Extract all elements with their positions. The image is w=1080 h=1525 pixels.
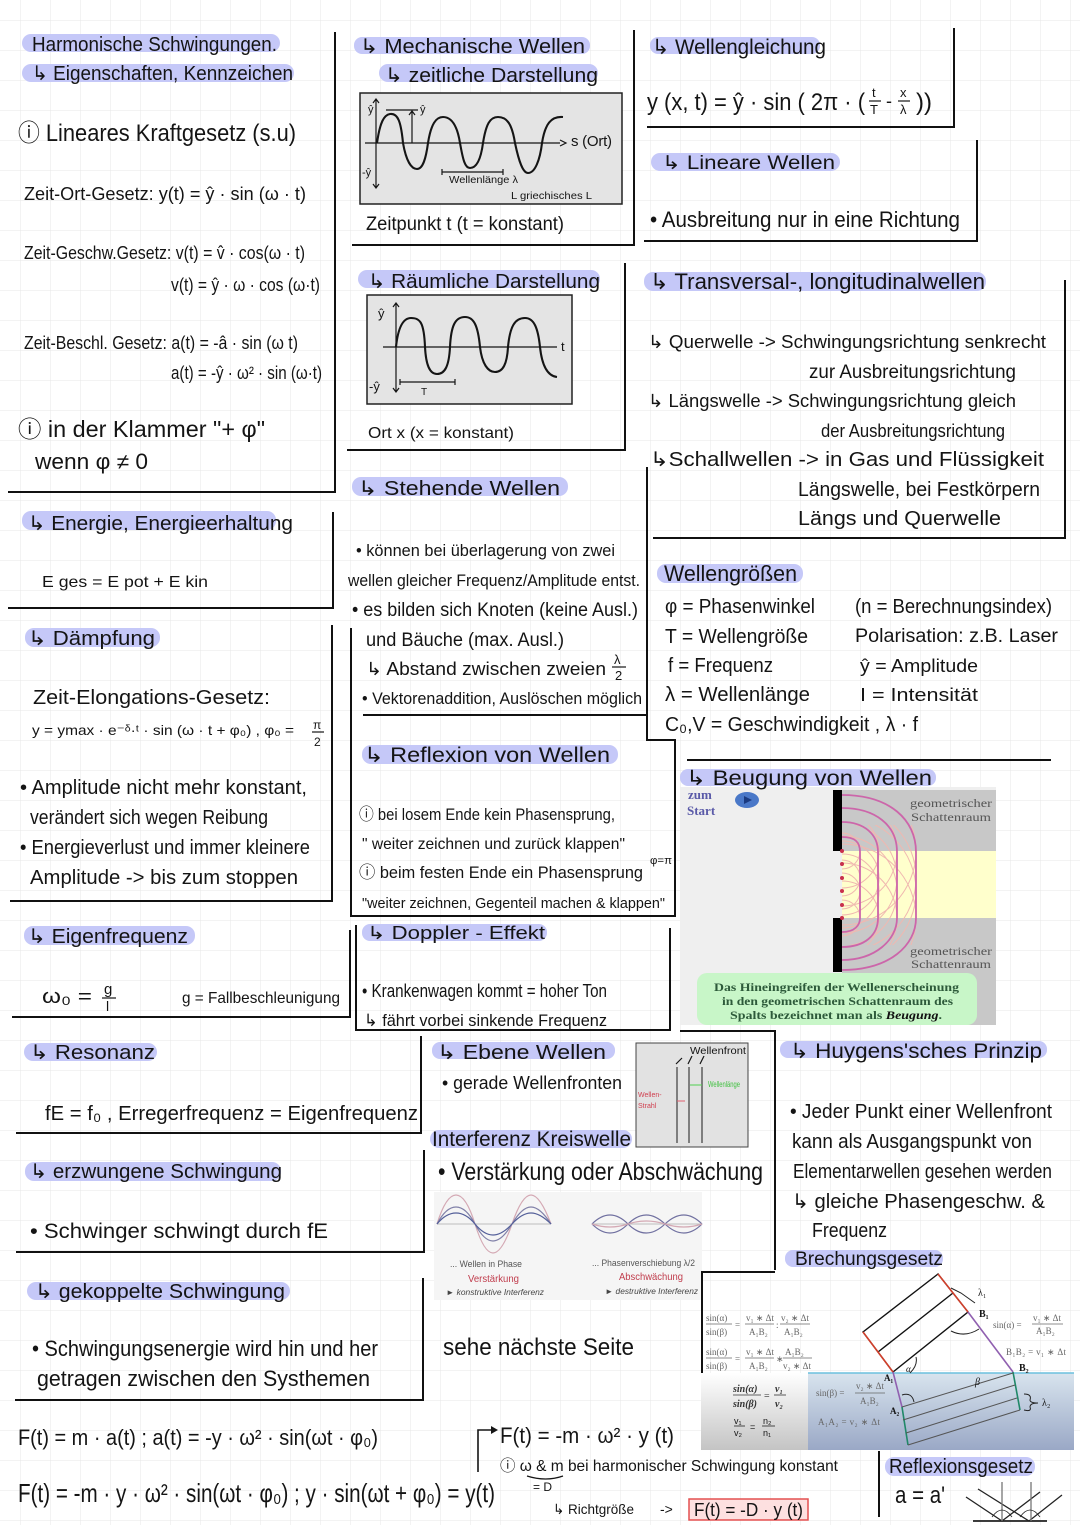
text: Querwelle: ↳ Querwelle -> Schwingungsrichtung senkrecht: [648, 332, 1046, 352]
panel: Energie: [8, 511, 333, 608]
heading: Interferenz Kreiswelle: Interferenz Kreiswelle: [432, 1128, 631, 1151]
formulas: refraction derivation: [706, 1313, 812, 1438]
formula: Zeit-Geschw.-Gesetz: Zeit-Geschw.Gesetz: v(t) = v̂ · cos(ω · t): [24, 243, 305, 263]
list: Amplitude: [20, 777, 310, 889]
list: further quantities: (n = Berechnungsindex): [855, 596, 1052, 618]
diagram: refraction: A₁B₂: [1036, 1326, 1055, 1336]
chart: wave over place: Wellenlänge λ: [449, 175, 518, 186]
note: omega and m constant: [500, 1457, 839, 1494]
text: Längswelle: ↳ Längswelle -> Schwingungsrichtung gleich: [648, 391, 1016, 411]
diagram: refraction: sin(α) =: [993, 1320, 1022, 1330]
text: Schallwellen: [650, 449, 1044, 530]
panel: Eigenfrequenz: [12, 926, 350, 1017]
formulas: refraction derivation: ∗: [776, 1354, 784, 1364]
formula: Zeit-Beschl.-Gesetz: Zeit-Beschl. Gesetz: a(t) = -â · sin (ω t): [24, 333, 298, 353]
panel: Resonanz: [16, 1036, 421, 1133]
text: Huygens: [790, 1101, 1052, 1242]
panel: räumliche Darstellung: [347, 263, 625, 450]
formulas: refraction derivation: :: [776, 1320, 779, 1330]
heading: Brechungsgesetz: Brechungsgesetz: [795, 1249, 943, 1270]
heading: Räumliche Darstellung: ↳ Räumliche Darstellung: [368, 271, 600, 293]
formula: Zeit-Geschw.-Gesetz: v(t) = ŷ · ω · cos (ω·t): [171, 275, 320, 295]
diagram: refraction: A₁A₂ = v₂ ∗ Δt: [818, 1417, 880, 1427]
formula: Wellengleichung: x: [900, 85, 907, 100]
chart: constructive and destructive interference: ... Wellen in Phase: [450, 1259, 522, 1269]
list: Reflexion: ⓘ beim festen Ende ein Phasensprung: [359, 863, 643, 882]
panel: Brechungsgesetz: [701, 1249, 1074, 1450]
diagram: refraction: α: [906, 1364, 911, 1374]
formula: Zeit-Elongations-Gesetz: π: [313, 718, 321, 732]
panel: lineares Kraftgesetz: [478, 1423, 839, 1520]
formulas: refraction derivation: sin(α): [732, 1384, 757, 1395]
heading: Reflexion von Wellen: ↳ Reflexion von Wellen: [364, 744, 610, 767]
text: Schallwellen: Längs und Querwelle: [798, 508, 1001, 530]
formulas: refraction derivation: v₂: [734, 1428, 742, 1438]
heading: Transversal-, Longitudinalwellen: ↳ Transversal-, longitudinalwellen: [650, 269, 985, 294]
list: quantities: f = Frequenz: [668, 655, 773, 677]
formulas: refraction derivation: =: [764, 1391, 770, 1402]
diagram: diffraction: geometrischer: [910, 944, 992, 958]
chart: wave over place: -ŷ: [362, 167, 372, 179]
chart: wave over time: ŷ: [378, 306, 385, 321]
text: Schwingungsenergie: • Schwingungsenergie wird hin und her: [32, 1336, 378, 1361]
list: Reflexion: ⓘ bei losem Ende kein Phasensprung,: [359, 805, 615, 824]
chart: wave over place: [360, 93, 622, 204]
text: Schwinger: • Schwinger schwingt durch fE: [30, 1220, 328, 1243]
arrow: to F(t): [478, 1426, 498, 1472]
text: gerade Wellenfronten: • gerade Wellenfronten: [442, 1073, 622, 1093]
heading: Mechanische Wellen: ↳ Mechanische Wellen: [360, 36, 585, 58]
panel: erzwungene Schwingung: [16, 1150, 424, 1252]
diagram: diffraction: Das Hineingreifen der Wellenerscheinung: [714, 980, 959, 994]
panel: Wellengleichung: [647, 28, 954, 127]
formulas: refraction derivation: sin(α): [706, 1313, 727, 1323]
formula: Zeit-Elongations-Gesetz: Zeit-Elongations-Gesetz:: [33, 687, 270, 709]
list: stehende Wellen: wellen gleicher Frequenz/Amplitude entst.: [347, 571, 640, 590]
diagram: Wellenfront: Strahl: [638, 1103, 657, 1110]
formulas: refraction derivation: sin(β): [706, 1327, 727, 1337]
list: further quantities: I = Intensität: [860, 685, 978, 705]
diagram: refraction: B₂: [1019, 1363, 1029, 1374]
formula: Wellengleichung: λ: [900, 102, 907, 117]
list: Amplitude: Amplitude -> bis zum stoppen: [30, 867, 298, 889]
panel: Transversal- und Longitudinalwellen: [644, 269, 1065, 538]
formula: Wellengleichung: y (x, t) = ŷ · sin ( 2π · (: [647, 89, 865, 116]
panel: Beugung von Wellen: [680, 767, 996, 1025]
heading: Eigenfrequenz: ↳ Eigenfrequenz: [28, 926, 188, 948]
chart: wave over place: ŷ: [420, 104, 426, 116]
formula: Wellengleichung: )): [916, 89, 932, 116]
formulas: refraction derivation: v₂: [775, 1399, 783, 1410]
list: Reflexion: φ=π: [650, 855, 672, 867]
formula: Zeit-Beschl.-Gesetz: [24, 333, 322, 383]
diagram: diffraction: Schattenraum: [911, 810, 992, 824]
formulas: refraction derivation: sin(β): [706, 1361, 727, 1371]
formulas: refraction derivation: n₁: [763, 1428, 771, 1438]
panel: Wellengrößen: [657, 561, 1059, 760]
text: Huygens: • Jeder Punkt einer Wellenfront: [790, 1101, 1052, 1123]
diagram: refraction: λ₁: [978, 1288, 986, 1299]
formula: Omega: ω₀ =: [42, 986, 92, 1008]
diagram: Wellenfront: Wellenlänge: [708, 1080, 740, 1089]
text: Schallwellen: ↳Schallwellen -> in Gas und Flüssigkeit: [650, 449, 1044, 471]
formulas: Kraft: F(t) = -m · y · ω² · sin(ωt · φ₀) ; y · sin(ωt + φ₀) = y(t): [18, 1478, 495, 1508]
chart: constructive and destructive interference: ... Phasenverschiebung λ/2: [592, 1258, 695, 1268]
chart: wave over time: [367, 295, 572, 404]
text: Querwelle: zur Ausbreitungsrichtung: [809, 362, 1016, 383]
text: Huygens: ↳ gleiche Phasengeschw. &: [792, 1191, 1046, 1213]
text: Schwingungsenergie: getragen zwischen den Systhemen: [37, 1366, 370, 1391]
diagram: diffraction: in den geometrischen Schattenraum des: [722, 994, 953, 1008]
formula: Energie: E ges = E pot + E kin: [42, 574, 208, 591]
list: quantities: λ = Wellenlänge: [665, 684, 810, 706]
list: stehende Wellen: ↳ Abstand zwischen zweien: [366, 659, 606, 679]
formula: Zeit-Elongations-Gesetz: [32, 687, 324, 749]
chart: constructive and destructive interference: ► konstruktive Interferenz: [446, 1288, 544, 1297]
formulas: Kraft: [18, 1425, 495, 1508]
text: Fallbeschleunigung: g = Fallbeschleunigung: [182, 990, 340, 1007]
list: Reflexion: [359, 805, 672, 912]
text: lineares Kraftgesetz: ⓘ Lineares Kraftgesetz (s.u): [18, 120, 296, 147]
formula: Omega: l: [106, 998, 109, 1014]
panel: Reflexionsgesetz: [879, 1451, 1062, 1521]
chart: constructive and destructive interference: Abschwächung: [619, 1272, 683, 1283]
diagram: refraction: A₁: [884, 1373, 893, 1383]
formula: alpha equals alpha prime: a = a': [895, 1482, 945, 1509]
formula: Zeit-Elongations-Gesetz: 2: [314, 735, 321, 749]
callout: F(t) = -D y(t): F(t) = -D · y (t): [694, 1500, 803, 1520]
formulas: Kraft: F(t) = m · a(t) ; a(t) = -y · ω² · sin(ωt · φ₀): [18, 1425, 378, 1450]
diagram: refraction: β: [974, 1377, 980, 1388]
diagram: diffraction: zum: [688, 787, 712, 802]
diagram: refraction: λ₂: [1042, 1398, 1050, 1409]
formula: Zeit-Geschw.-Gesetz: [24, 243, 320, 295]
formula: Omega: [42, 981, 116, 1014]
heading: Doppler-Effekt: ↳ Doppler - Effekt: [367, 923, 545, 943]
text: Verstärkung oder Abschwächung: • Verstärkung oder Abschwächung: [438, 1158, 763, 1186]
list: further quantities: Polarisation: z.B. Laser: [855, 626, 1059, 647]
heading: gekoppelte Schwingung: ↳ gekoppelte Schwingung: [35, 1281, 285, 1303]
chart: wave over place: L griechisches L: [511, 191, 592, 202]
diagram: diffraction: Schattenraum: [911, 957, 992, 971]
chart: wave over place: s (Ort): [571, 133, 612, 150]
panel: gekoppelte Schwingung: [15, 1278, 423, 1400]
formulas: refraction derivation: v₁: [734, 1416, 742, 1426]
panel: Huygens'sches Prinzip: [780, 1040, 1052, 1242]
text: Krankenwagen: [362, 981, 607, 1030]
diagram: refraction: v₁ ∗ Δt: [1033, 1313, 1061, 1323]
text: Schallwellen: Längswelle, bei Festkörpern: [798, 479, 1040, 501]
diagram: diffraction: [680, 777, 996, 1025]
formulas: refraction derivation: v₁ ∗ Δt: [746, 1347, 774, 1357]
diagram: Wellenfront: [636, 1043, 748, 1147]
note: omega and m constant: ⓘ ω & m bei harmonischer Schwingung konstant: [500, 1457, 839, 1475]
list: stehende Wellen: • es bilden sich Knoten (keine Ausl.): [352, 600, 638, 621]
list: Amplitude: • Energieverlust und immer kleinere: [20, 837, 310, 859]
chart: wave over time: T: [421, 387, 427, 398]
formula: Omega: g: [104, 981, 112, 998]
panel: Doppler-Effekt: [356, 923, 670, 1030]
heading: erzwungene Schwingung: ↳ erzwungene Schwingung: [30, 1161, 282, 1183]
text: Längswelle: der Ausbreitungsrichtung: [821, 421, 1005, 441]
list: stehende Wellen: • Vektorenaddition, Auslöschen möglich: [362, 689, 642, 708]
note: Klammer: ⓘ in der Klammer "+ φ": [18, 416, 265, 442]
formulas: refraction derivation: sin(β): [732, 1399, 757, 1410]
list: stehende Wellen: und Bäuche (max. Ausl.): [366, 630, 564, 651]
text: sehe nächste Seite: sehe nächste Seite: [443, 1334, 634, 1361]
heading: Wellengrößen: Wellengrößen: [664, 561, 797, 586]
text: Krankenwagen: ↳ fährt vorbei sinkende Frequenz: [364, 1011, 607, 1030]
formulas: refraction derivation: v₁: [775, 1384, 783, 1395]
heading: Eigenschaften, Kennzeichen: ↳ Eigenschaften, Kennzeichen: [32, 63, 293, 85]
formulas: refraction derivation: v₂ ∗ Δt: [783, 1361, 811, 1371]
diagram: diffraction: geometrischer: [910, 796, 992, 810]
heading: Lineare Wellen: ↳ Lineare Wellen: [662, 153, 835, 174]
heading: Huygens'sches Prinzip: ↳ Huygens'sches Prinzip: [790, 1040, 1042, 1063]
formula: F(t): F(t) = -m · ω² · y (t): [500, 1423, 674, 1448]
text: Schwingungsenergie: [32, 1336, 378, 1391]
list: stehende Wellen: 2: [615, 668, 622, 683]
diagram: diffraction: Start: [687, 803, 716, 818]
heading: Energie, Energieerhaltung: ↳ Energie, Energieerhaltung: [28, 513, 293, 535]
heading: Wellengleichung: ↳ Wellengleichung: [652, 36, 826, 59]
formulas: refraction derivation: =: [750, 1422, 755, 1432]
formula: Wellengleichung: -: [886, 91, 892, 111]
formulas: refraction derivation: n₂: [763, 1416, 772, 1426]
diagram: refraction: B₁: [979, 1309, 989, 1320]
text: Längswelle: [648, 391, 1016, 441]
formulas: refraction derivation: =: [735, 1354, 740, 1364]
list: further quantities: [855, 596, 1059, 705]
text: Ausbreitung: • Ausbreitung nur in eine Richtung: [650, 207, 960, 232]
text: Querwelle: [648, 332, 1046, 383]
text: Huygens: kann als Ausgangspunkt von: [792, 1131, 1032, 1153]
panel: Dämpfung: [10, 625, 332, 901]
formula: Zeit-Beschl.-Gesetz: a(t) = -ŷ · ω² · sin (ω·t): [171, 363, 322, 383]
list: stehende Wellen: λ: [614, 652, 621, 667]
chart: constructive and destructive interference: ► destruktive Interferenz: [605, 1287, 698, 1296]
formula: Zeit-Ort-Gesetz: Zeit-Ort-Gesetz: y(t) = ŷ · sin (ω · t): [24, 184, 306, 204]
list: Amplitude: • Amplitude nicht mehr konstant,: [20, 777, 307, 799]
diagram: refraction: A₁B₂: [860, 1396, 879, 1406]
text: Huygens: Frequenz: [812, 1220, 887, 1242]
formulas: refraction derivation: A₁B₂: [784, 1327, 803, 1337]
chart: wave over place: ŷ: [368, 104, 374, 116]
formulas: refraction derivation: v₁ ∗ Δt: [746, 1313, 774, 1323]
list: quantities: C₀,V = Geschwindigkeit , λ · f: [665, 714, 918, 736]
chart: constructive and destructive interference: Verstärkung: [468, 1274, 519, 1285]
list: quantities: [665, 596, 918, 736]
note: Klammer: [18, 416, 265, 474]
formulas: refraction derivation: A₁B₂: [785, 1347, 804, 1357]
heading: Beugung von Wellen: ↳ Beugung von Wellen: [686, 767, 932, 790]
panel: harmonische Schwingungen: [8, 32, 335, 492]
formula: Wellengleichung: T: [870, 102, 878, 117]
caption: Zeitpunkt t: Zeitpunkt t (t = konstant): [366, 214, 564, 235]
panel: mechanische Wellen: [352, 30, 634, 245]
diagram: refraction: v₂ ∗ Δt: [856, 1381, 884, 1391]
list: Reflexion: "weiter zeichnen, Gegenteil machen & klappen": [362, 895, 665, 912]
list: quantities: φ = Phasenwinkel: [665, 596, 815, 618]
formulas: refraction derivation: sin(α): [706, 1347, 727, 1357]
heading: zeitliche Darstellung: ↳ zeitliche Darstellung: [385, 65, 598, 87]
diagram: refraction: [701, 1274, 1074, 1450]
list: Amplitude: verändert sich wegen Reibung: [30, 807, 268, 829]
note: Klammer: wenn φ ≠ 0: [34, 449, 148, 474]
chart: wave over time: -ŷ: [369, 379, 380, 394]
caption: Ort x: Ort x (x = konstant): [368, 425, 514, 442]
panel: lineare Wellen: [644, 140, 977, 241]
panel: stehende Wellen: [347, 477, 647, 715]
diagram: diffraction: Spalts bezeichnet man als Beugung .: [730, 1008, 942, 1022]
formulas: refraction derivation: A₁B₂: [749, 1361, 768, 1371]
text: Richtgröße: ↳ Richtgröße: [553, 1501, 634, 1517]
note: omega and m constant: = D: [533, 1480, 552, 1494]
formula: Wellengleichung: t: [872, 85, 876, 100]
diagram: refraction: sin(β) =: [816, 1388, 844, 1398]
heading: Resonanz: ↳ Resonanz: [30, 1042, 155, 1064]
text: Krankenwagen: • Krankenwagen kommt = hoher Ton: [362, 981, 607, 1001]
list: further quantities: ŷ = Amplitude: [860, 656, 978, 676]
formula: Resonanz: fE = f₀ , Erregerfrequenz = Eigenfrequenz: [45, 1103, 418, 1125]
formulas: refraction derivation: =: [735, 1320, 740, 1330]
formulas: refraction derivation: A₁B₂: [749, 1327, 768, 1337]
list: quantities: T = Wellengröße: [665, 626, 808, 648]
diagram: Wellenfront: Wellen-: [638, 1092, 662, 1099]
diagram: reflection: [966, 1482, 1062, 1521]
list: stehende Wellen: [347, 541, 642, 708]
text: Richtgröße: ->: [660, 1501, 673, 1517]
diagram: Wellenfront: Wellenfront: [690, 1046, 746, 1057]
heading: Harmonische Schwingungen: Harmonische Schwingungen.: [32, 34, 277, 56]
panel: ebene Wellen und Interferenz: [430, 1031, 775, 1300]
chart: constructive and destructive interference: [434, 1192, 702, 1300]
list: stehende Wellen: • können bei überlagerung von zwei: [356, 541, 615, 560]
formula: Zeit-Elongations-Gesetz: y = ymax · e⁻ᵟ·ᵗ · sin (ω · t + φ₀) , φ₀ =: [32, 722, 294, 738]
heading: Stehende Wellen: ↳ Stehende Wellen: [358, 478, 560, 500]
heading: Dämpfung: ↳ Dämpfung: [28, 628, 155, 650]
heading: Reflexionsgesetz: Reflexionsgesetz: [889, 1456, 1033, 1478]
chart: wave over time: t: [561, 339, 565, 354]
panel: Reflexion von Wellen: [351, 467, 675, 916]
diagram: refraction: A₂: [890, 1406, 899, 1416]
diagram: refraction: B₁B₂ = v₁ ∗ Δt: [1006, 1347, 1066, 1357]
list: Reflexion: " weiter zeichnen und zurück klappen": [362, 836, 625, 853]
heading: Ebene Wellen: ↳ Ebene Wellen: [437, 1042, 606, 1064]
formulas: refraction derivation: v₂ ∗ Δt: [781, 1313, 809, 1323]
